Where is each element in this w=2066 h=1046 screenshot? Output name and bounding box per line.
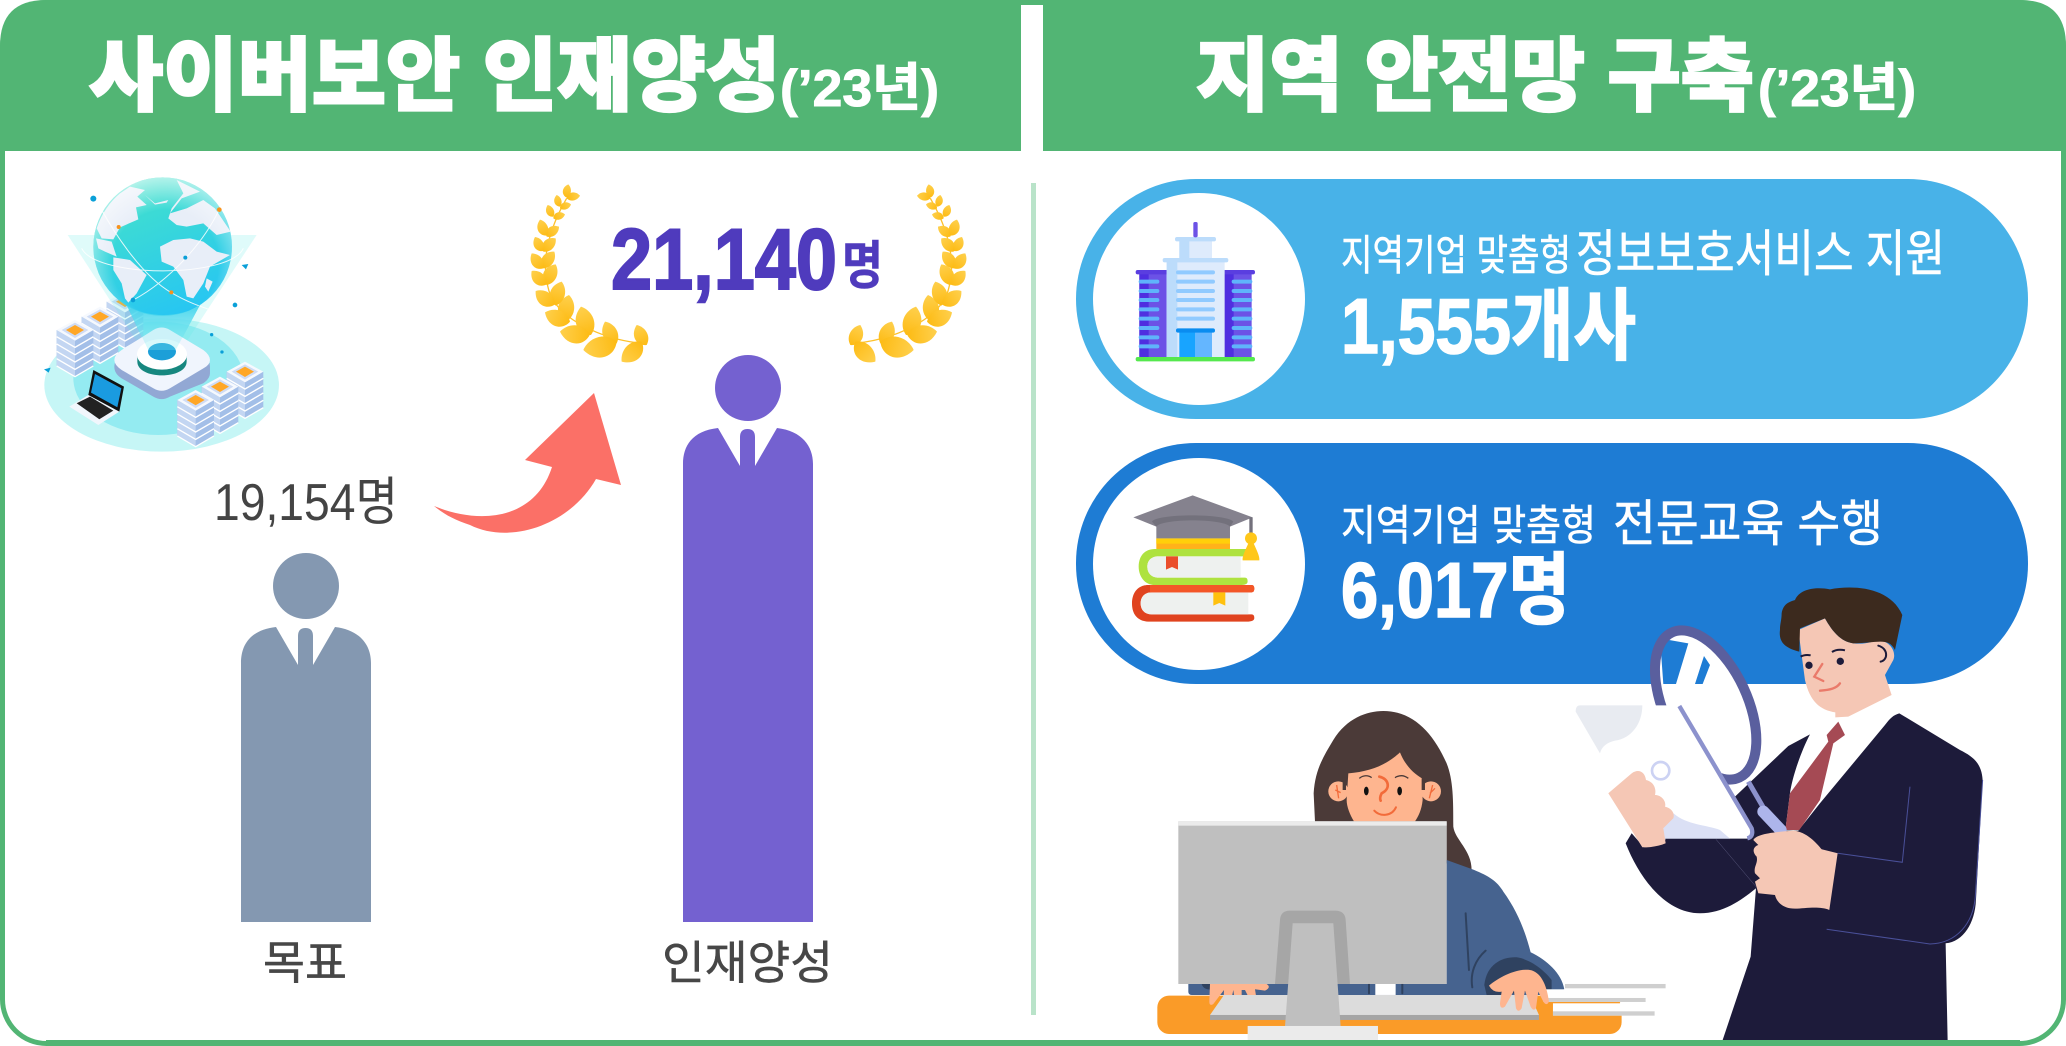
value: 19,154명: 19,154명: [214, 474, 398, 532]
icon: globe and servers: [44, 177, 279, 452]
laurel wreath: [526, 184, 971, 369]
frame bottom edge: [46, 1040, 2020, 1046]
label: 인재양성: 인재양성: [662, 927, 833, 993]
title: left: (’23년): [780, 60, 939, 118]
icon: office building: [1136, 222, 1255, 361]
illustration: woman at computer: [1157, 711, 1666, 1041]
illustration: man with magnifier: [1576, 588, 1983, 1040]
header bar: left: [0, 0, 1021, 151]
person: target: [241, 553, 371, 922]
header bar: right: [1021, 0, 2066, 151]
laurel right: [845, 184, 971, 369]
icon: books and graduation cap: [1132, 495, 1259, 622]
person: achieved: [683, 355, 813, 922]
text: training: 지역기업 맞춤형: [1341, 492, 1596, 553]
panel: service support pill: [1076, 179, 2028, 419]
value: 21,140명: 21,140: [611, 212, 837, 308]
text: training: [1341, 484, 1883, 634]
text: service support: [1341, 214, 1945, 370]
arrow: [434, 393, 621, 533]
title: left: 사이버보안 인재양성: [89, 12, 780, 128]
text: training: 6,017명: [1341, 546, 1570, 634]
text: service support: 1,555개사: [1341, 282, 1636, 370]
text: service support: 정보보호서비스 지원: [1576, 214, 1945, 286]
laurel left: [526, 184, 652, 369]
title: right: (’23년): [1758, 60, 1916, 118]
header gap: [1021, 5, 1043, 151]
text: service support: 지역기업 맞춤형: [1341, 222, 1571, 283]
title: right: 지역 안전망 구축: [1196, 12, 1754, 128]
panel: training pill: [1076, 443, 2028, 684]
central divider: [1031, 183, 1036, 1015]
value: 21,140명: 명: [842, 224, 883, 299]
label: 목표: 목표: [263, 927, 347, 993]
text: training: 전문교육 수행: [1613, 484, 1883, 556]
